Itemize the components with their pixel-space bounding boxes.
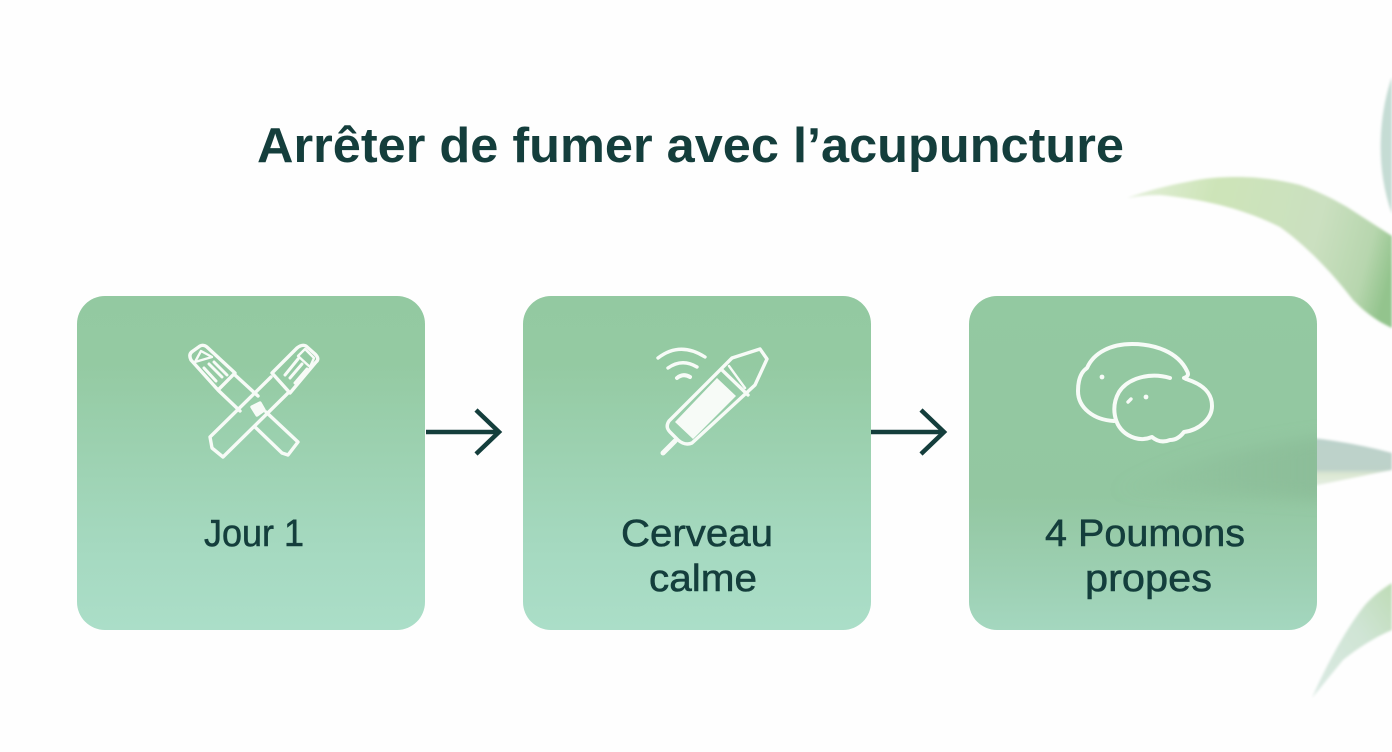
panel: Cerveau calme <box>523 296 871 630</box>
leaf shadow through card <box>1268 446 1317 490</box>
panel: 4 Poumons propes <box>969 296 1330 630</box>
label: 4 Poumons propes: propes <box>1085 558 1212 600</box>
arrow: step 1 to step 2 <box>426 410 499 454</box>
panel: Jour 1 <box>77 296 425 630</box>
leaf: bottom right <box>1312 583 1392 698</box>
label: Cerveau calme: Cerveau <box>621 513 773 555</box>
label: Cerveau calme: calme <box>649 558 757 600</box>
leaf: middle right <box>1312 438 1392 486</box>
title: Arrêter de fumer avec l’acupuncture <box>257 119 1124 173</box>
label: 4 Poumons propes: 4 Poumons <box>1045 513 1245 555</box>
arrow: step 2 to step 3 <box>871 410 944 454</box>
icon: pen with waves <box>658 349 767 453</box>
label: 4 Poumons propes <box>1045 513 1245 600</box>
icon: crossed cigarettes <box>190 345 318 457</box>
leaf: top right edge <box>1381 77 1392 214</box>
icon: lungs <box>1078 344 1212 441</box>
label: Cerveau calme <box>621 513 773 600</box>
label: Jour 1: Jour 1 <box>204 513 304 555</box>
leaf: upper right <box>1127 177 1392 328</box>
